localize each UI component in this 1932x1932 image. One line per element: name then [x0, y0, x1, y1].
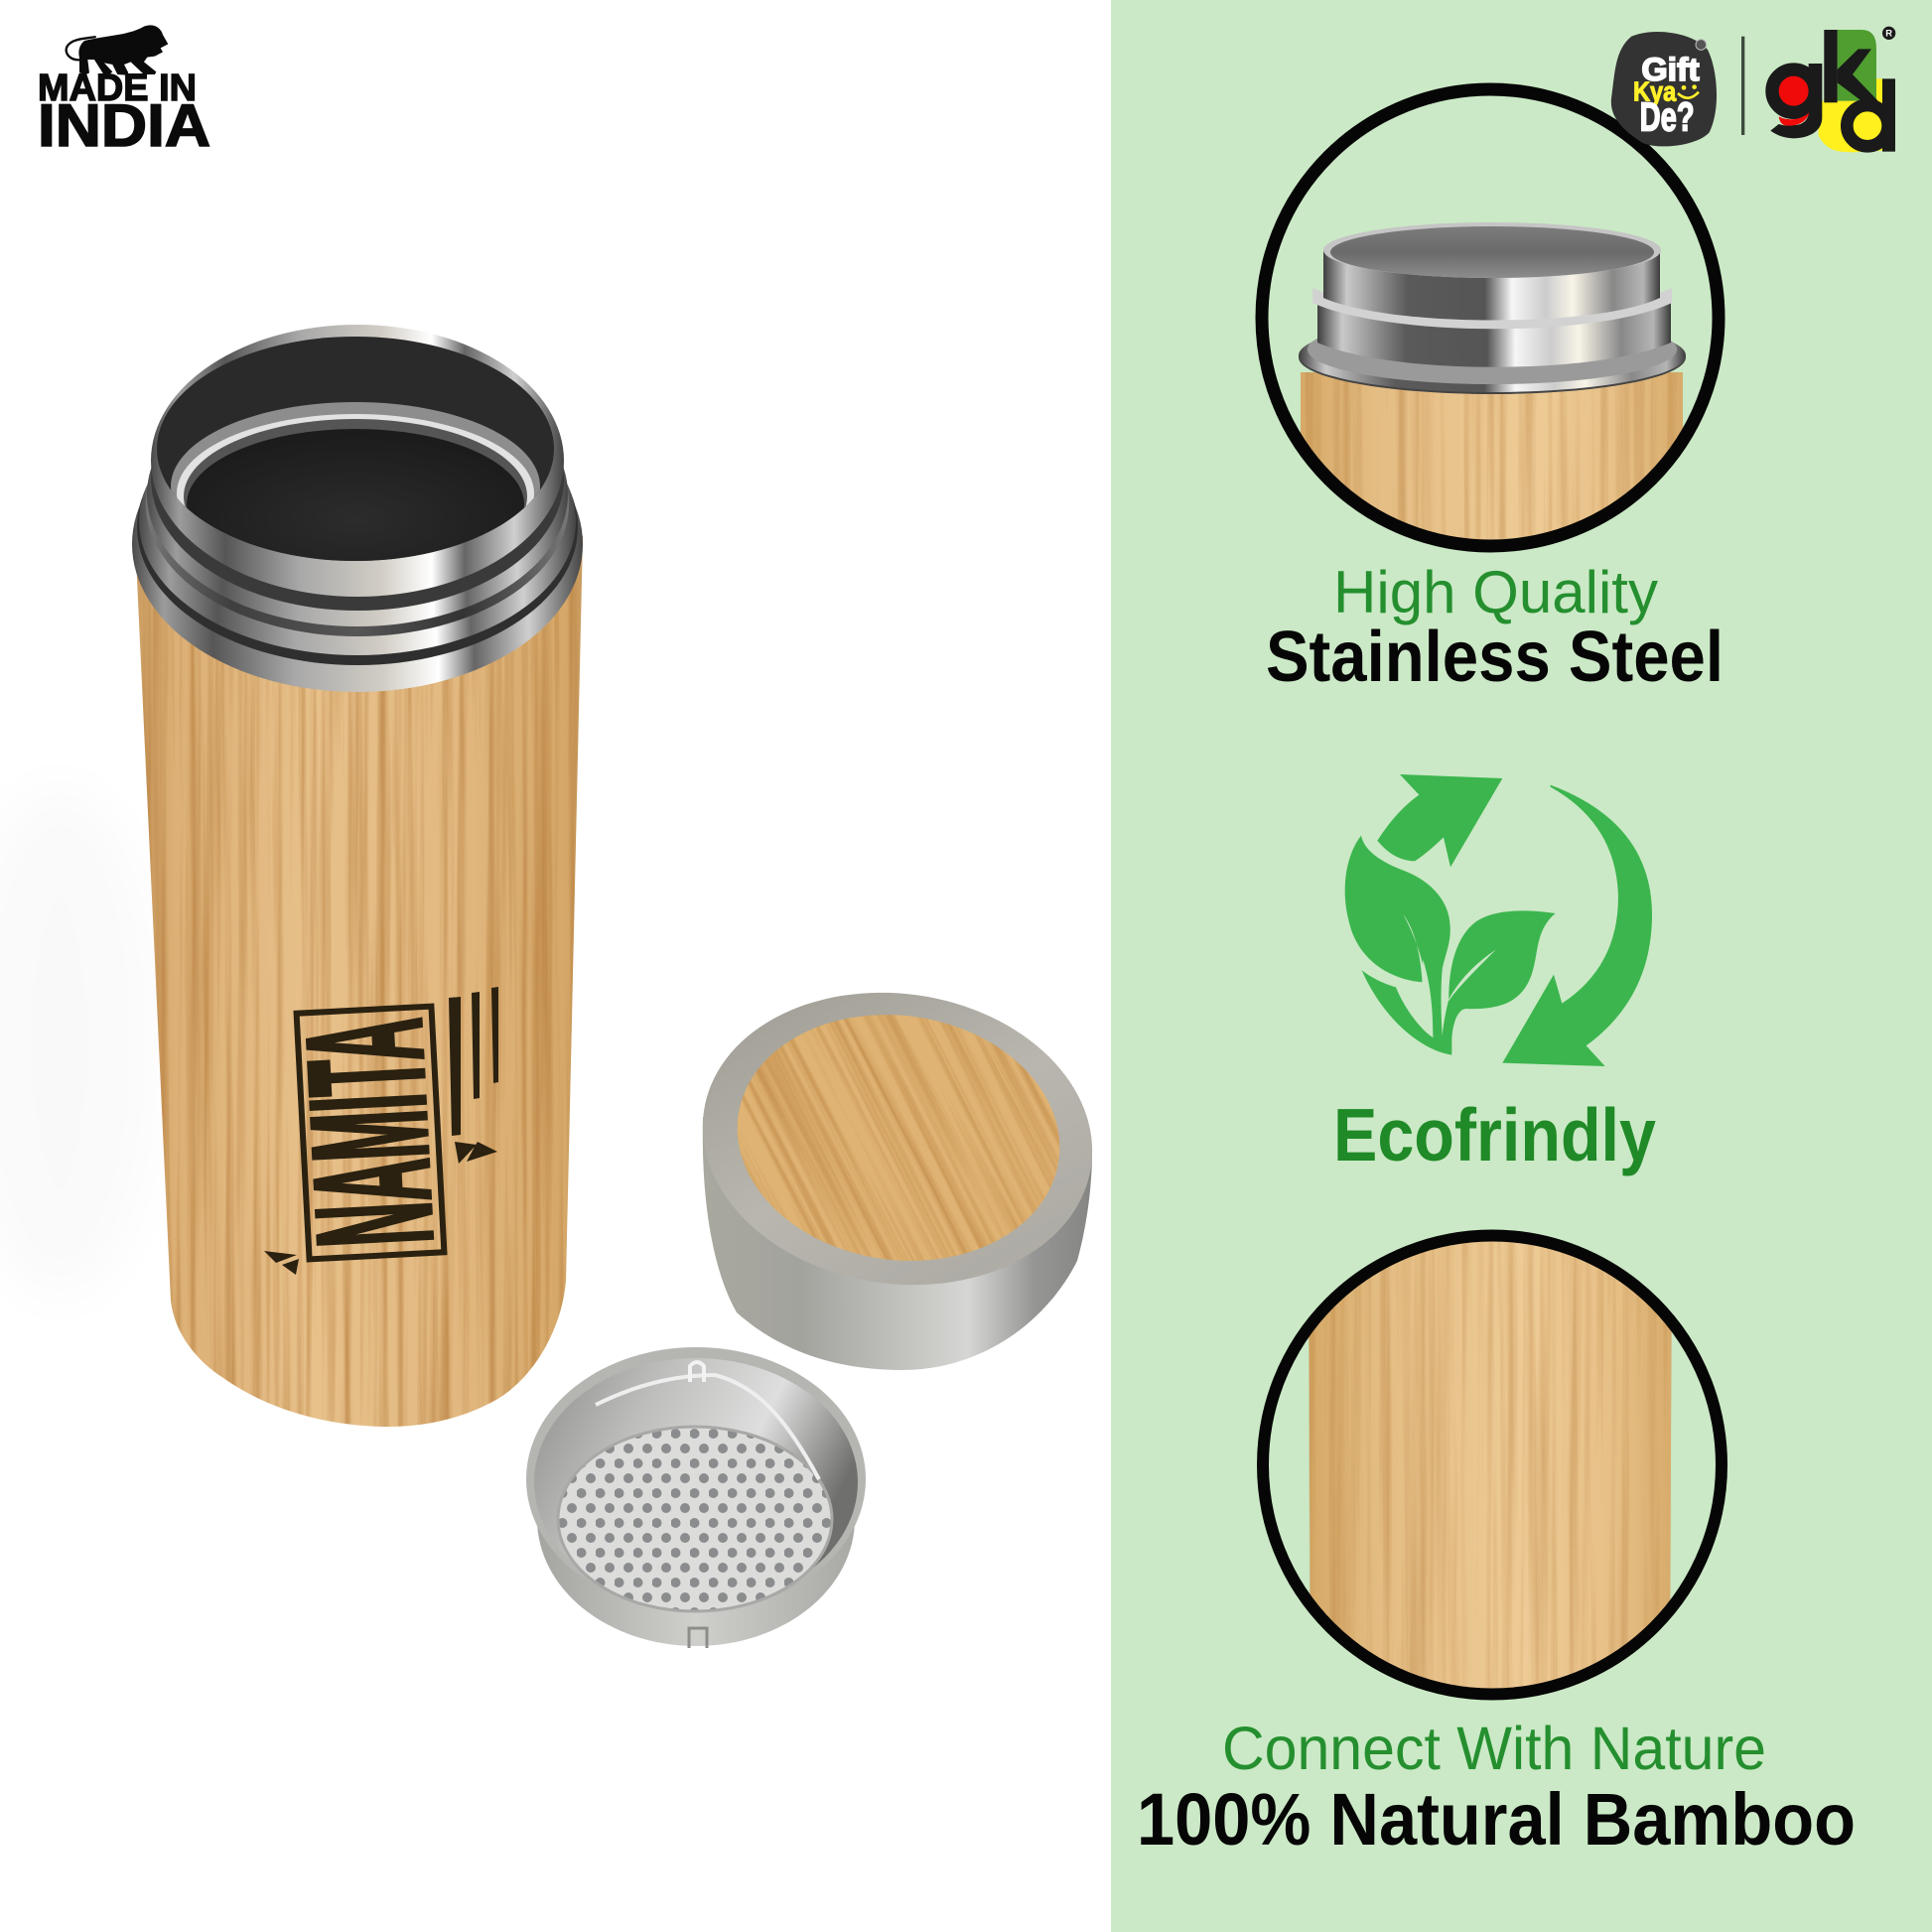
wire handle: [596, 1375, 819, 1479]
lid side: [703, 1117, 1092, 1370]
close-up ring: [1263, 1235, 1722, 1694]
right leaf vein: [1449, 950, 1496, 1001]
left leaf: [1345, 836, 1450, 1037]
engraved name: [272, 1005, 467, 1261]
text: made in: MADE IN: [38, 68, 197, 109]
strainer rim: [526, 1347, 866, 1611]
close-up ring: [1262, 89, 1719, 546]
product: steel lid with bamboo top: [703, 993, 1092, 1370]
heading: stainless steel: Stainless Steel: [1266, 618, 1724, 697]
panel: green features column: [1111, 0, 1932, 1932]
logo: gift kya de: [1611, 32, 1717, 146]
close-up bamboo: [1309, 1231, 1672, 1700]
icon: recycle leaf: [1345, 774, 1652, 1066]
top tab: [690, 1362, 704, 1382]
divider: [1741, 37, 1744, 135]
recycle arrow down: [1502, 785, 1652, 1066]
feature: stainless steel close-up: [1262, 89, 1719, 561]
heading: high quality: High Quality: [1333, 559, 1658, 625]
bottle body: [129, 526, 591, 1435]
heading: ecofrindly: Ecofrindly: [1333, 1093, 1656, 1176]
product: bamboo bottle: NAMITA: [272, 1015, 467, 1251]
icon: lion: [67, 25, 168, 75]
logo: gift kya de: Gift: [1641, 52, 1700, 87]
recycle arrow up: [1377, 774, 1502, 867]
steel collar: [132, 325, 583, 692]
logo: gkd: R: [1885, 29, 1892, 39]
product: bamboo bottle: [129, 325, 591, 1435]
close-up bottle: [1299, 222, 1686, 561]
lower swoosh: [1362, 970, 1451, 1055]
bottle interior: [171, 402, 540, 561]
engraved lines and arrows: [264, 987, 498, 1275]
lid rim: [684, 968, 1111, 1310]
logo: gkd: [1770, 27, 1895, 152]
logo: gift kya de and gkd: [1611, 27, 1895, 152]
strainer body: [537, 1392, 855, 1646]
logo: gift kya de: De?: [1640, 94, 1695, 140]
soft floor shading: [0, 784, 159, 1301]
front tab: [689, 1628, 707, 1648]
leaf vein: [1403, 914, 1433, 1037]
heading: connect with nature: Connect With Nature: [1222, 1715, 1766, 1782]
feature: bamboo close-up: [1263, 1231, 1722, 1700]
right leaf: [1443, 910, 1556, 1055]
logo: made in india: [38, 25, 210, 159]
logo: gift kya de: Kya: [1633, 76, 1677, 107]
lid bamboo disc: [737, 1015, 1060, 1261]
text: india: INDIA: [38, 92, 210, 159]
strainer mesh: [558, 1427, 832, 1611]
heading: 100% natural bamboo: 100% Natural Bamboo: [1137, 1778, 1856, 1861]
product: mesh tea strainer: [526, 1347, 866, 1648]
strainer wall: [534, 1358, 858, 1606]
